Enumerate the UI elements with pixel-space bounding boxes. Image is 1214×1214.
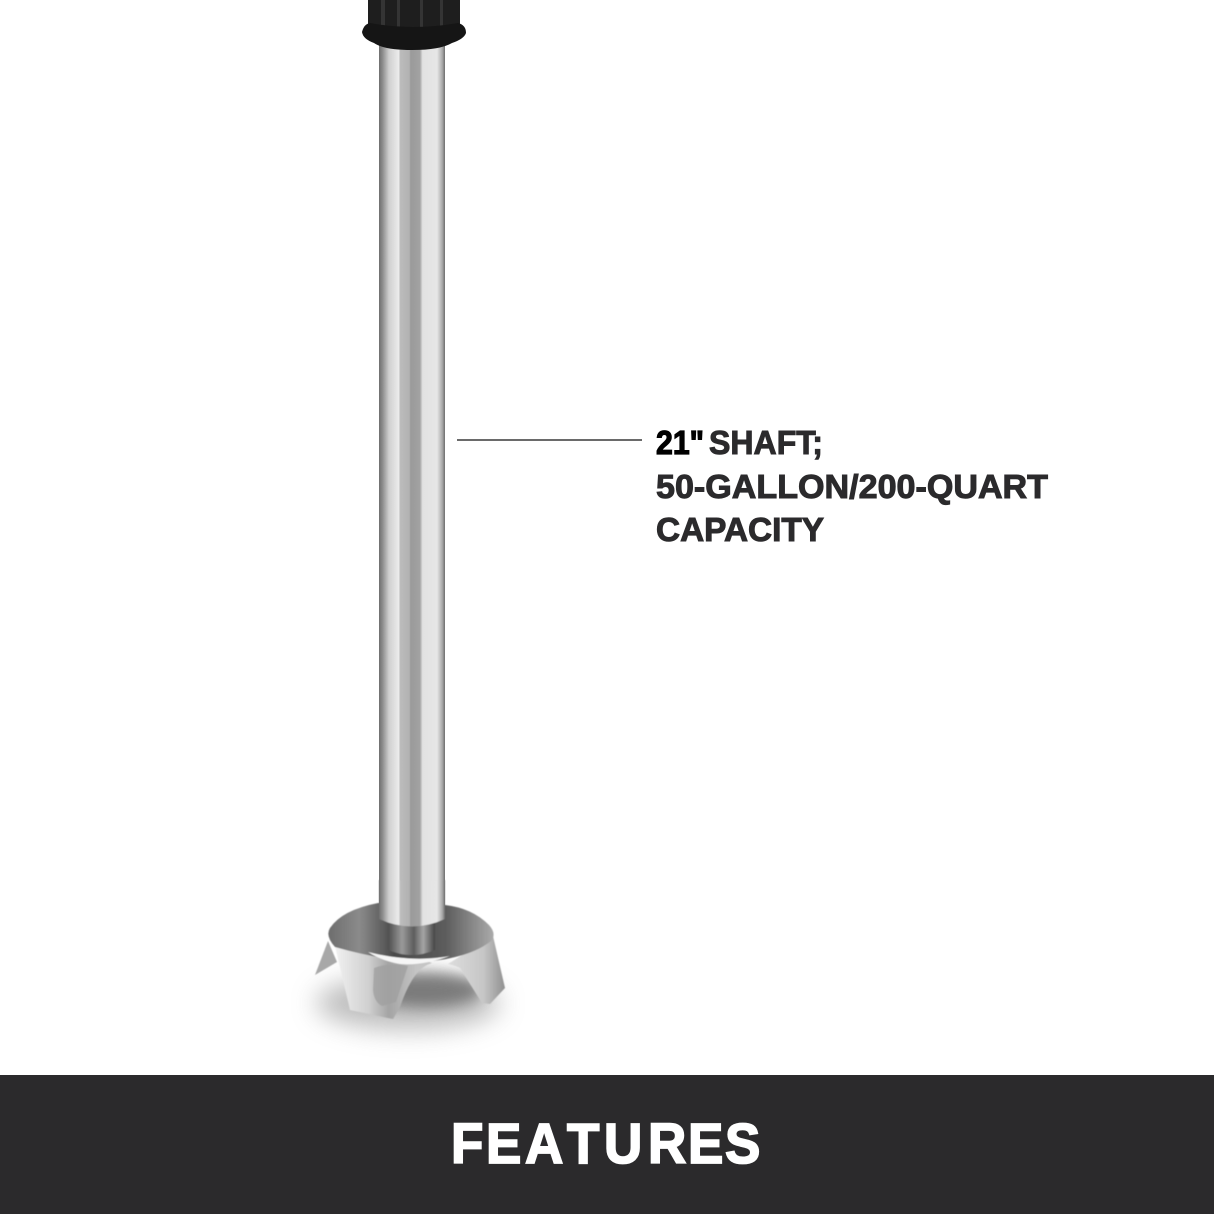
back flap bbox=[315, 941, 337, 975]
callout text: SHAFT; bbox=[709, 425, 823, 462]
shaft base bbox=[379, 880, 445, 926]
blender shaft illustration bbox=[315, 0, 505, 1030]
neck reflection bbox=[388, 922, 435, 955]
right leg bbox=[448, 936, 505, 1004]
blade guard bbox=[315, 880, 505, 1019]
leg reflection bbox=[373, 964, 408, 1006]
stainless steel shaft bbox=[379, 40, 445, 910]
callout text: 50-GALLON/200-QUART bbox=[656, 469, 1049, 506]
callout text bbox=[656, 425, 1049, 549]
motor housing collar bbox=[362, 0, 466, 50]
leader line bbox=[457, 439, 642, 441]
rim highlight bbox=[368, 952, 450, 964]
left leg bbox=[335, 946, 432, 1019]
guard shadow bbox=[316, 973, 500, 1030]
features banner bbox=[0, 1075, 1214, 1214]
banner title: FEATURES bbox=[451, 1111, 760, 1175]
callout text: CAPACITY bbox=[656, 512, 824, 549]
dome bbox=[328, 903, 494, 962]
callout text: 21" bbox=[656, 425, 704, 462]
